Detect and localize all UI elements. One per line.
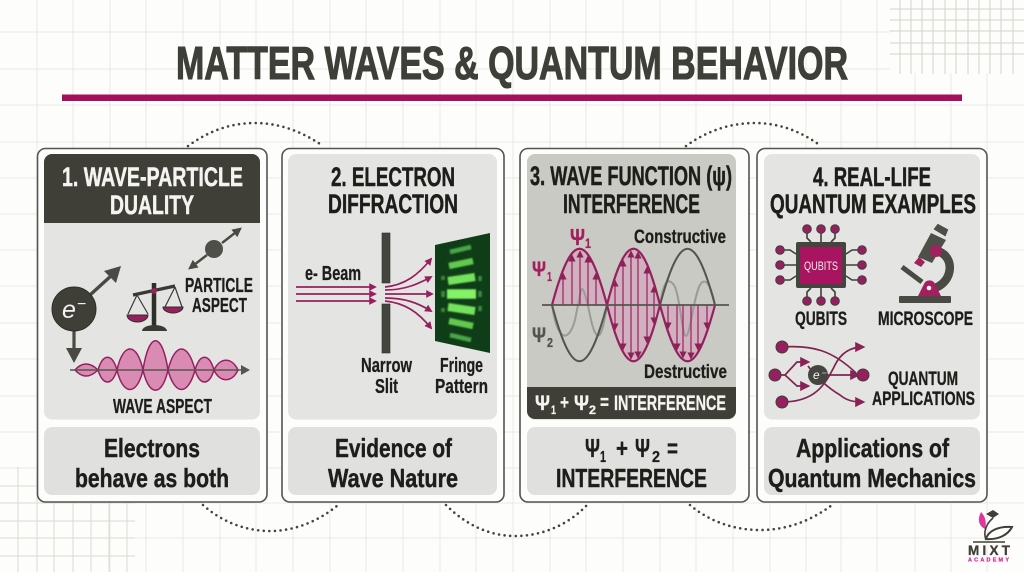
quantum applications label — [872, 369, 975, 410]
caption panel: Ψ — [635, 433, 650, 463]
caption panel: Electrons — [104, 433, 200, 463]
slit barrier — [382, 233, 390, 353]
icon: qubit chip — [776, 225, 866, 305]
equation band: Ψ — [574, 392, 589, 415]
diffracted arrows — [385, 259, 432, 328]
caption panel: = — [667, 433, 678, 463]
quantum applications label: QUANTUM — [888, 369, 958, 390]
qubits label: QUBITS — [795, 309, 847, 330]
card outline — [38, 148, 267, 502]
microscope label: MICROSCOPE — [878, 309, 973, 330]
card outline — [757, 148, 987, 502]
quantum applications label: APPLICATIONS — [872, 389, 975, 410]
equation band: = — [600, 392, 609, 414]
logo: mixt academy: ACADEMY — [968, 558, 1009, 564]
panel: 3 wave function interference — [520, 148, 749, 502]
heading — [770, 162, 976, 219]
caption panel: Applications of — [796, 433, 949, 463]
panel: 1 wave-particle duality — [38, 148, 267, 502]
heading: 4. REAL-LIFE — [813, 162, 931, 192]
icon: balance scale — [127, 283, 183, 331]
caption panel: INTERFERENCE — [556, 463, 707, 493]
caption panel — [288, 427, 497, 495]
heading band — [44, 154, 260, 223]
caption panel: Wave Nature — [328, 463, 458, 493]
caption panel: Quantum Mechanics — [768, 463, 976, 493]
pink fill lobes — [552, 249, 715, 361]
heading — [328, 162, 458, 219]
heading: 2. ELECTRON — [331, 162, 455, 192]
dotted connectors — [188, 123, 832, 536]
heading — [530, 161, 732, 219]
caption panel — [44, 427, 260, 495]
particle aspect label: PARTICLE — [185, 274, 253, 297]
fringe pattern screen — [435, 233, 490, 353]
chart: interference waves — [542, 249, 729, 361]
panel: 4 real-life quantum examples — [757, 148, 987, 502]
psi 1 left label: 1 — [547, 269, 552, 284]
psi 2 label: Ψ — [532, 324, 546, 347]
title underline bar — [62, 94, 962, 101]
caption panel: 1 — [600, 449, 606, 466]
diagram background — [44, 154, 260, 420]
narrow slit label — [361, 355, 412, 398]
caption panel — [527, 427, 736, 495]
card outline — [282, 148, 504, 502]
icon: particle with arrows — [190, 229, 240, 268]
psi 1 top label: 1 — [585, 235, 591, 251]
incoming beam arrows — [296, 287, 375, 301]
caption panel: behave as both — [75, 463, 229, 493]
destructive label: Destructive — [644, 362, 727, 383]
equation band: 1 — [551, 403, 556, 417]
equation band: + — [560, 392, 569, 414]
logo: mixt academy: MIXT — [968, 543, 1011, 558]
wave aspect label: WAVE ASPECT — [113, 396, 212, 418]
narrow slit label: Slit — [375, 376, 398, 398]
psi 1 left label: Ψ — [532, 258, 546, 281]
chart: wave packet — [70, 341, 250, 390]
e-beam label: e- Beam — [305, 263, 361, 285]
psi 2 label: 2 — [547, 335, 553, 350]
icon: microscope — [899, 225, 951, 303]
icon: qubit chip: QUBITS — [804, 259, 838, 273]
icon: quantum applications network — [769, 341, 869, 408]
panel: 2 electron diffraction — [282, 148, 504, 502]
heading: INTERFERENCE — [563, 189, 700, 219]
card outline — [520, 148, 749, 502]
heading band: DUALITY — [110, 190, 194, 220]
fringe pattern label: Fringe — [440, 355, 483, 377]
heading band: 1. WAVE-PARTICLE — [62, 162, 243, 192]
logo: mixt academy — [968, 510, 1012, 564]
diagram background — [764, 154, 980, 420]
equation band: INTERFERENCE — [614, 392, 726, 415]
caption panel: Ψ — [585, 433, 600, 463]
equation band: Ψ — [535, 392, 550, 415]
caption panel — [764, 427, 980, 495]
heading: DIFFRACTION — [328, 189, 458, 219]
equation band: 2 — [589, 403, 596, 417]
caption panel: Evidence of — [335, 433, 452, 463]
icon: electron with arrows: e — [62, 296, 76, 324]
caption panel: 2 — [652, 449, 660, 466]
particle aspect label — [185, 274, 253, 317]
fringe pattern label: Pattern — [435, 376, 488, 398]
psi 1 top label: Ψ — [570, 224, 585, 250]
particle aspect label: ASPECT — [192, 294, 247, 317]
caption panel: + — [616, 433, 628, 463]
equation band — [527, 387, 736, 419]
fringe pattern label — [435, 355, 488, 398]
narrow slit label: Narrow — [361, 355, 412, 377]
icon: electron with arrows: − — [77, 296, 86, 313]
diagram background — [527, 154, 736, 420]
icon: quantum applications network: e⁻ — [813, 368, 828, 382]
diagram background — [288, 154, 497, 420]
constructive label: Constructive — [634, 227, 726, 248]
heading: 3. WAVE FUNCTION (ψ) — [530, 161, 732, 191]
icon: electron with arrows — [52, 266, 121, 363]
